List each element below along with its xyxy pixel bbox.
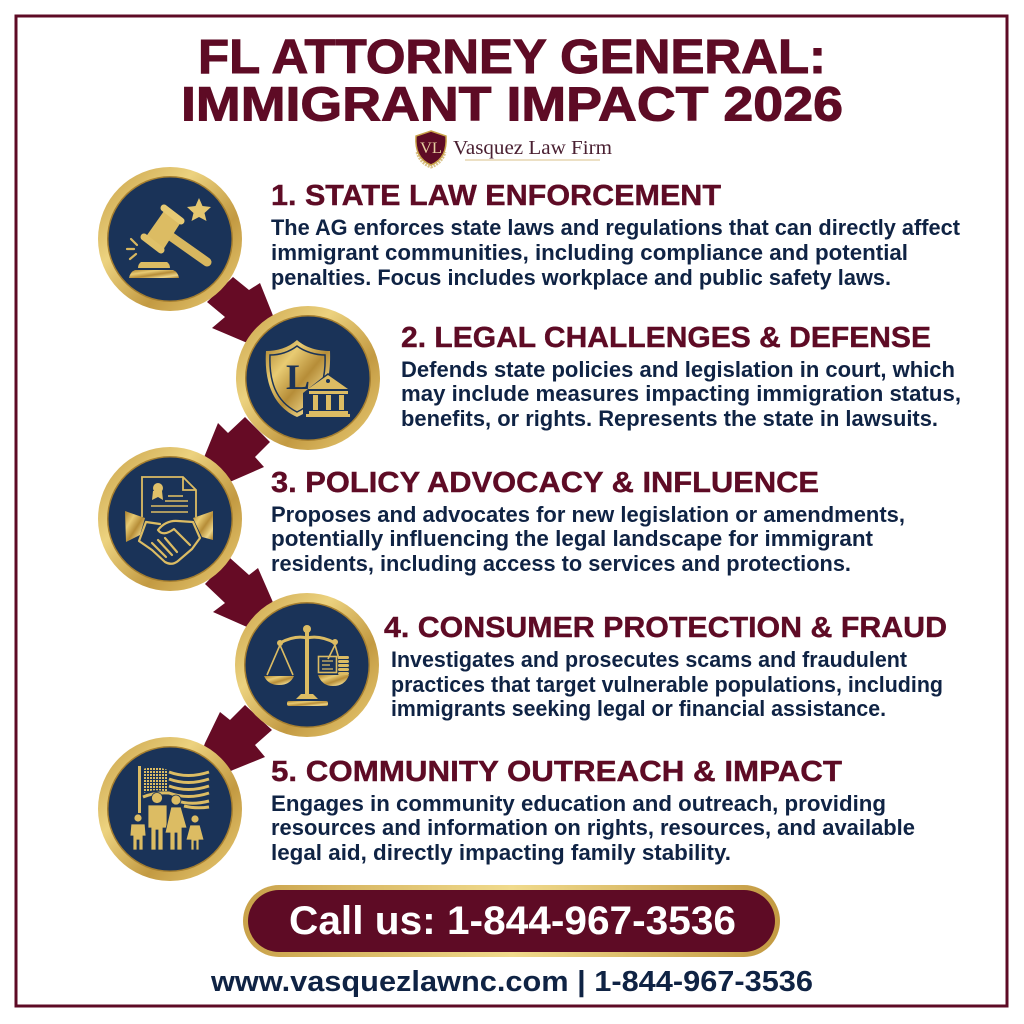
step 3 text: Proposes and advocates for new legislation or amendments, [271, 502, 905, 527]
arrow: step 3 to 4 [205, 558, 290, 647]
title: FL ATTORNEY GENERAL: [198, 31, 826, 84]
step 3 text: potentially influencing the legal landscape for immigrant [271, 526, 874, 551]
step 5 text: resources and information on rights, resources, and available [271, 815, 915, 840]
icon: document and handshake badge [98, 447, 242, 591]
step 2 text: may include measures impacting immigration status, [401, 381, 961, 406]
step 5 text: legal aid, directly impacting family stability. [271, 840, 731, 865]
icon: scales of justice badge [235, 593, 379, 737]
call button: Call us: 1-844-967-3536 [289, 899, 736, 943]
step 3 text: 3. POLICY ADVOCACY & INFLUENCE [271, 467, 819, 499]
step 4 text: Investigates and prosecutes scams and fraudulent [391, 647, 908, 672]
step 2 text: benefits, or rights. Represents the state in lawsuits. [401, 406, 938, 431]
step 2 text: 2. LEGAL CHALLENGES & DEFENSE [401, 322, 931, 354]
step 2 text [401, 322, 961, 431]
firm logo: VL [420, 140, 442, 157]
arrow: step 1 to 2 [207, 277, 290, 360]
icon: shield and courthouse badge: L [286, 357, 310, 397]
icon: flag and family badge [98, 737, 242, 881]
step 4 text: immigrants seeking legal or financial assistance. [391, 696, 886, 721]
title [181, 31, 843, 132]
step 2 text: Defends state policies and legislation in court, which [401, 357, 955, 382]
website and phone line: www.vasquezlawnc.com | 1-844-967-3536 [210, 966, 813, 998]
step 1 text: penalties. Focus includes workplace and public safety laws. [271, 265, 891, 290]
step 4 text: practices that target vulnerable populations, including [391, 672, 943, 697]
firm logo [416, 131, 612, 167]
arrow: step 4 to 5 [188, 705, 272, 790]
step 5 text: Engages in community education and outreach, providing [271, 791, 886, 816]
icon: gavel badge [98, 167, 242, 311]
step 4 text [384, 612, 947, 721]
title: IMMIGRANT IMPACT 2026 [181, 78, 843, 132]
step 1 text: The AG enforces state laws and regulations that can directly affect [271, 215, 961, 240]
step 3 text: residents, including access to services and protections. [271, 551, 851, 576]
step 5 text [271, 756, 915, 865]
step 1 text: immigrant communities, including compliance and potential [271, 240, 908, 265]
arrow: step 2 to 3 [188, 417, 270, 500]
step 5 text: 5. COMMUNITY OUTREACH & IMPACT [271, 756, 842, 788]
icon: shield and courthouse badge [236, 306, 380, 450]
step 4 text: 4. CONSUMER PROTECTION & FRAUD [384, 612, 947, 644]
step 1 text: 1. STATE LAW ENFORCEMENT [271, 180, 721, 212]
call button [243, 885, 780, 957]
step 1 text [271, 180, 961, 290]
firm logo: Vasquez Law Firm [453, 137, 612, 159]
step 3 text [271, 467, 905, 576]
